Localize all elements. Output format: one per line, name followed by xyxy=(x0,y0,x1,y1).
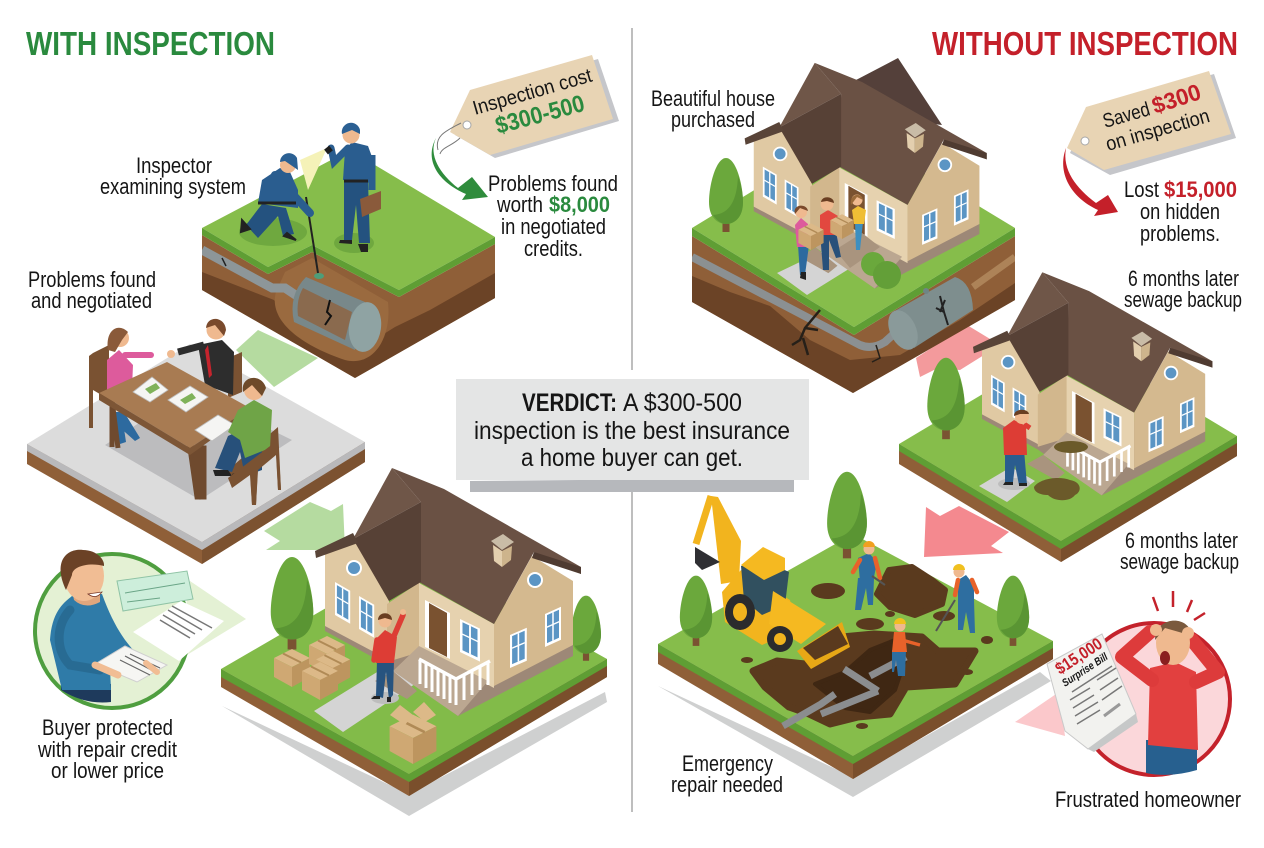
icon: frustrated homeowner xyxy=(1078,591,1230,775)
tree xyxy=(827,472,867,558)
scene: emergency repair xyxy=(658,472,1053,797)
inspector standing xyxy=(326,123,381,252)
price tag: saved $300: Saved xyxy=(1100,98,1153,133)
sewage puddles xyxy=(1034,441,1088,500)
label: beautiful house xyxy=(651,86,775,132)
arrow: backup to repair xyxy=(924,506,1009,557)
pink callout wedge xyxy=(1015,692,1065,736)
scene: beautiful house purchased xyxy=(692,58,1015,393)
inspector kneeling xyxy=(241,153,310,240)
icon: cracked septic tank xyxy=(882,277,973,355)
tree xyxy=(680,576,712,646)
curved arrow: red xyxy=(1063,148,1118,216)
worker in trench xyxy=(892,618,920,676)
paper in hand xyxy=(95,646,167,682)
label: problems found and negotiated: and negotiated xyxy=(31,288,152,313)
price tag: saved $300 xyxy=(1067,71,1236,175)
label: beautiful house: purchased xyxy=(671,107,755,132)
house xyxy=(745,63,987,289)
center divider xyxy=(631,28,633,812)
verdict box: inspection is the best insurance xyxy=(474,417,790,445)
moving boxes xyxy=(274,636,436,764)
house xyxy=(973,272,1212,495)
label: emergency repair xyxy=(671,751,783,797)
price tag: saved $300: on inspection xyxy=(1103,105,1212,156)
label: buyer protected: or lower price xyxy=(51,758,164,783)
excavator xyxy=(695,496,850,669)
price tag: inspection cost xyxy=(437,55,619,158)
front steps xyxy=(835,233,880,268)
verdict box: a home buyer can get. xyxy=(521,444,743,472)
rear roof peak xyxy=(856,58,942,125)
callout: lost $15,000: $15,000 xyxy=(1164,177,1237,202)
callout: problems found worth $8,000 xyxy=(488,171,618,261)
mud and trench xyxy=(741,567,993,729)
homeowner at door xyxy=(998,410,1030,490)
label: emergency repair: Emergency xyxy=(682,751,773,776)
label: emergency repair: repair needed xyxy=(671,772,783,797)
scene: inspector examining system xyxy=(202,123,495,378)
worker with shovel right xyxy=(936,564,977,633)
man in suit xyxy=(167,319,234,395)
check xyxy=(117,571,193,611)
left heading: WITH INSPECTION xyxy=(26,26,275,63)
arrow: negotiation to house xyxy=(264,502,345,550)
label: 6 months later lower: 6 months later xyxy=(1125,528,1238,553)
label: problems found and negotiated xyxy=(28,267,156,313)
callout: problems found worth $8,000: $8,000 xyxy=(549,192,610,217)
pale green callout wedge xyxy=(177,581,246,661)
verdict box: A $300-500 xyxy=(623,389,742,417)
callout: problems found worth $8,000: Problems found xyxy=(488,171,618,196)
callout: lost $15,000: problems. xyxy=(1140,221,1220,246)
arrow: house to sewage backup xyxy=(916,325,1000,377)
tree xyxy=(571,596,601,661)
label: inspector: examining system xyxy=(100,174,246,199)
label: inspector: Inspector xyxy=(136,153,212,178)
icon: buyer with repair credit xyxy=(35,550,224,708)
callout: problems found worth $8,000: credits. xyxy=(524,236,583,261)
surprise bill xyxy=(1047,634,1138,752)
porch railing xyxy=(1067,444,1130,486)
label: buyer protected: with repair credit xyxy=(37,737,177,762)
man waving xyxy=(371,609,406,704)
porch railing xyxy=(419,659,490,705)
exposed pipes xyxy=(783,657,906,726)
worker with shovel xyxy=(853,541,885,610)
tree xyxy=(709,158,743,232)
document xyxy=(133,601,224,661)
surprise bill: $15,000 xyxy=(1052,634,1106,678)
briefcase xyxy=(360,191,381,217)
callout: lost $15,000: on hidden xyxy=(1140,199,1220,224)
tree xyxy=(271,557,313,650)
tree xyxy=(997,576,1029,646)
scene: sewage backup xyxy=(899,272,1237,562)
man in green xyxy=(213,378,281,505)
chairs xyxy=(89,345,281,505)
label: inspector xyxy=(100,153,246,199)
callout: problems found worth $8,000: in negotiated xyxy=(501,214,606,239)
label: 6 months later top: 6 months later xyxy=(1128,266,1239,291)
pipes and cracks xyxy=(692,257,1015,362)
label: buyer protected xyxy=(37,715,177,783)
shrubs xyxy=(861,252,901,289)
curved arrow: green xyxy=(432,138,488,200)
label: beautiful house: Beautiful house xyxy=(651,86,775,111)
price tag: inspection cost: Inspection cost xyxy=(470,65,595,120)
arrow: inspection to negotiation xyxy=(236,330,318,387)
icon: underground tank xyxy=(292,273,384,354)
woman in pink xyxy=(107,328,151,444)
surprise bill: Surprise Bill xyxy=(1060,651,1111,690)
scene: negotiating at table xyxy=(27,319,365,564)
label: 6 months later lower xyxy=(1120,528,1239,574)
alarm marks xyxy=(1153,591,1205,620)
tree xyxy=(927,358,965,439)
family carrying boxes xyxy=(795,194,866,280)
house xyxy=(315,468,581,716)
verdict box: VERDICT: xyxy=(522,389,617,417)
price tag: saved $300: $300 xyxy=(1149,79,1204,119)
label: problems found and negotiated: Problems found xyxy=(28,267,156,292)
verdict box xyxy=(456,379,809,492)
label: buyer protected: Buyer protected xyxy=(42,715,173,740)
scene: house with boxes xyxy=(221,468,607,816)
callout: lost $15,000 xyxy=(1124,177,1237,246)
platform shadow xyxy=(222,692,607,816)
callout: lost $15,000: Lost xyxy=(1124,177,1159,202)
price tag: inspection cost: $300-500 xyxy=(493,90,587,140)
callout: problems found worth $8,000: worth xyxy=(496,192,543,217)
label: 6 months later top xyxy=(1124,266,1242,312)
table xyxy=(99,362,250,497)
